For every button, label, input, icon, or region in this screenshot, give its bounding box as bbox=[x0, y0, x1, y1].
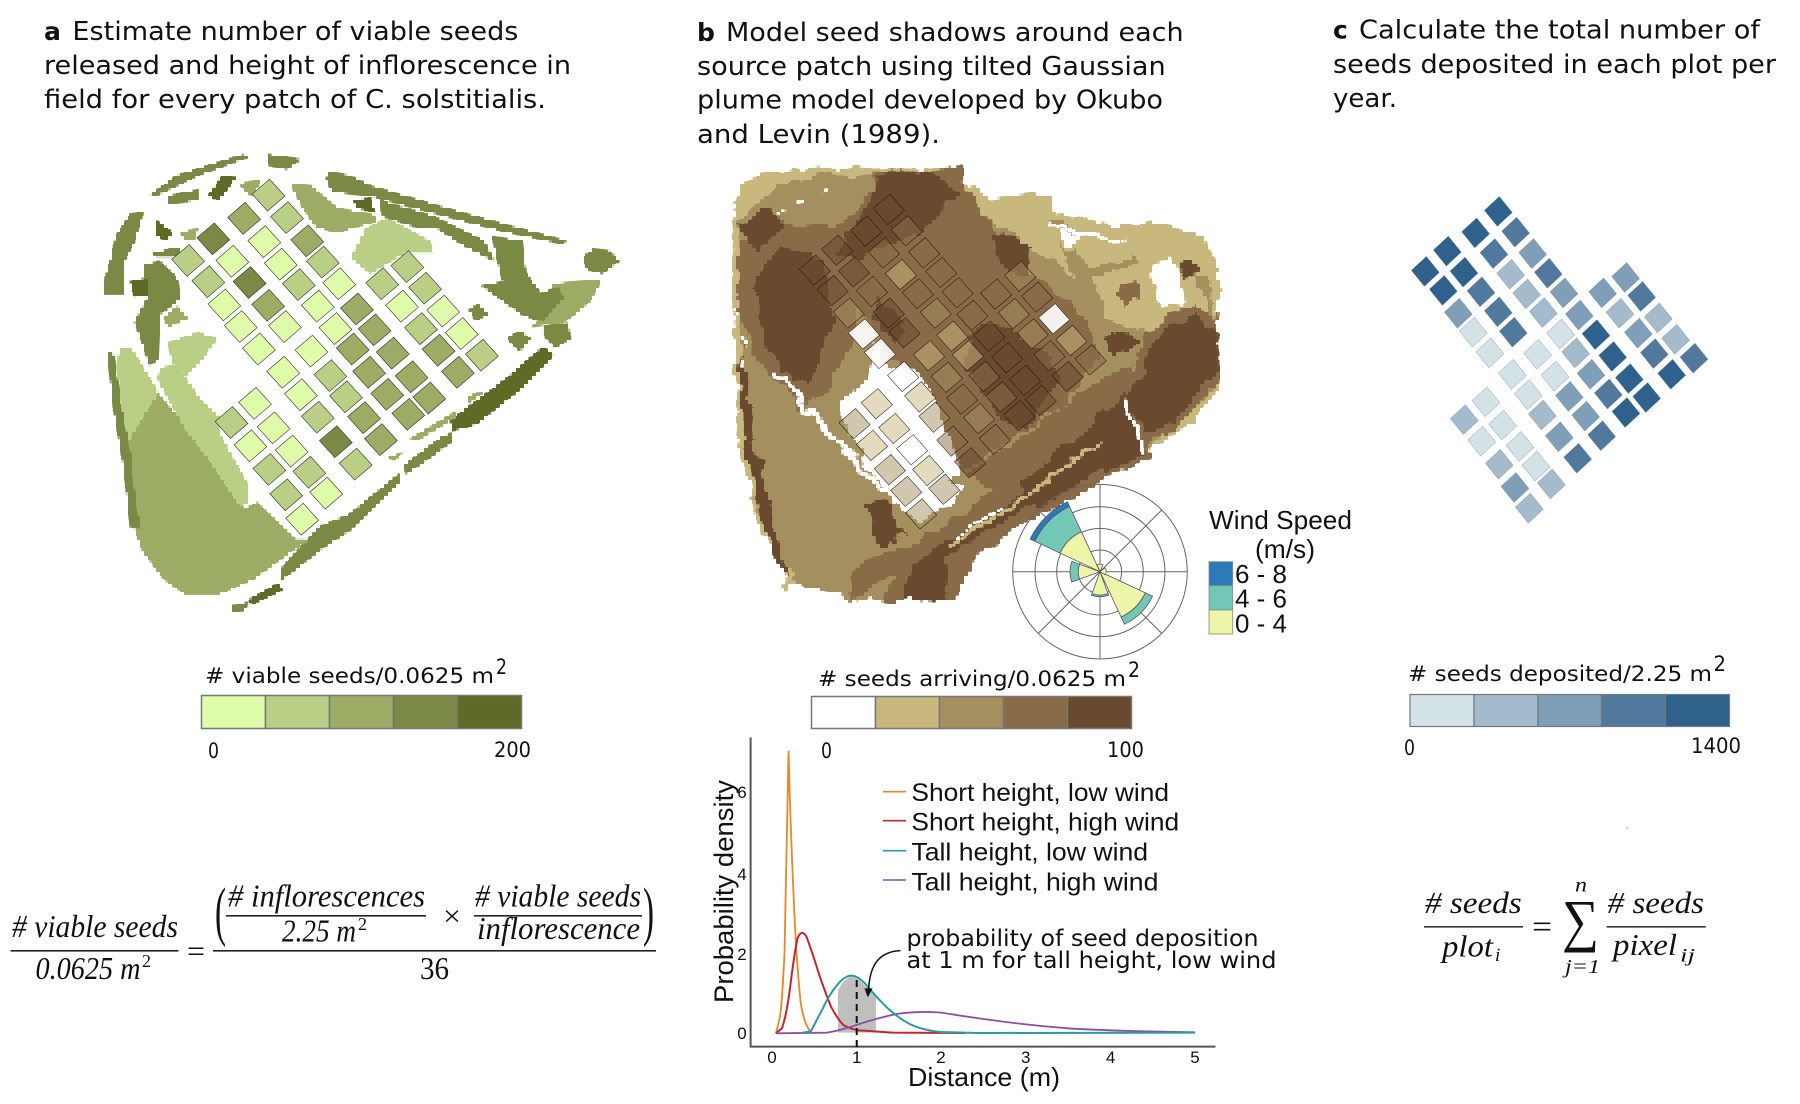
axis tick labels: 3 bbox=[1021, 1048, 1030, 1067]
heading: panel b: and Levin (1989). bbox=[697, 120, 940, 150]
chart legend: Tall height, high wind bbox=[911, 869, 1158, 897]
heading: panel c: Calculate the total number of bbox=[1359, 16, 1761, 46]
legend: seeds deposited colour bar: 2 bbox=[1714, 652, 1726, 676]
legend: seeds deposited colour bar: 0 bbox=[1404, 736, 1415, 760]
legend: wind speed: 6 - 8 bbox=[1235, 559, 1287, 589]
heading: panel a: a bbox=[44, 17, 61, 46]
curves and axes bbox=[751, 737, 1216, 1053]
formula: viable seeds: # viable seeds bbox=[475, 878, 641, 914]
formula: viable seeds: ( bbox=[215, 875, 226, 948]
heading: panel b: plume model developed by Okubo bbox=[697, 85, 1163, 115]
axis tick labels: 4 bbox=[1106, 1048, 1115, 1067]
formula: viable seeds bbox=[10, 875, 656, 986]
formula: viable seeds: inflorescence bbox=[477, 910, 640, 946]
axis tick labels: 2 bbox=[737, 945, 747, 964]
callout: probability of seed deposition: probability of seed deposition bbox=[906, 926, 1258, 952]
legend: seeds arriving colour bar: 100 bbox=[1107, 738, 1144, 762]
heading: panel c: seeds deposited in each plot per bbox=[1333, 50, 1776, 80]
heading: panel b: Model seed shadows around each bbox=[726, 18, 1184, 48]
legend: wind speed: 4 - 6 bbox=[1235, 584, 1287, 614]
formula: seeds per plot: plot bbox=[1440, 929, 1494, 964]
legend: seeds deposited colour bar: # seeds deposited/2.25 m bbox=[1408, 662, 1712, 686]
legend: viable seeds colour bar: # viable seeds/0.0625 m bbox=[205, 664, 494, 688]
chart legend: Short height, low wind bbox=[911, 779, 1169, 807]
formula: viable seeds: 0.0625 m bbox=[36, 950, 140, 986]
legend: viable seeds colour bar: 200 bbox=[494, 738, 531, 762]
axis tick labels bbox=[737, 783, 1200, 1067]
axis tick labels: 0 bbox=[737, 1024, 747, 1043]
heading: panel a: released and height of inflorescence in bbox=[44, 51, 571, 81]
legend: seeds deposited colour bar bbox=[1404, 652, 1741, 760]
formula: viable seeds: 2.25 m bbox=[282, 913, 356, 949]
formula: seeds per plot: n bbox=[1575, 873, 1587, 897]
map: viable seeds per patch bbox=[103, 154, 619, 612]
panel: c seeds deposited bbox=[1333, 16, 1776, 978]
y axis title: Probability density bbox=[709, 780, 739, 1003]
heading: panel c: year. bbox=[1333, 84, 1397, 114]
legend: viable seeds colour bar: 0 bbox=[208, 739, 219, 763]
formula: seeds per plot: # seeds bbox=[1425, 885, 1522, 920]
heading: panel a: field for every patch of C. solstitialis. bbox=[44, 85, 546, 115]
formula: seeds per plot: ∑ bbox=[1562, 888, 1599, 953]
heading: panel c bbox=[1333, 16, 1776, 114]
panel: a viable seeds bbox=[10, 17, 656, 986]
formula: seeds per plot bbox=[1424, 873, 1706, 978]
chart legend: Tall height, low wind bbox=[911, 839, 1148, 867]
chart: wind rose bbox=[1013, 484, 1187, 659]
heading: panel b: source patch using tilted Gaussian bbox=[697, 52, 1166, 82]
map: seeds arriving bbox=[734, 168, 1218, 601]
legend: wind speed: (m/s) bbox=[1255, 534, 1315, 564]
legend: wind speed: 0 - 4 bbox=[1235, 609, 1287, 639]
legend: viable seeds colour bar: 2 bbox=[496, 655, 507, 679]
formula: viable seeds: # inflorescences bbox=[228, 878, 425, 914]
legend: seeds deposited colour bar: 1400 bbox=[1691, 734, 1741, 758]
formula: viable seeds: 36 bbox=[420, 950, 449, 986]
axis tick labels: 2 bbox=[936, 1048, 946, 1067]
axis tick labels: 1 bbox=[852, 1048, 861, 1067]
chart legend: Short height, high wind bbox=[911, 809, 1179, 837]
legend: wind speed bbox=[1209, 505, 1352, 639]
panel: b seed shadows bbox=[697, 18, 1352, 1092]
plot tiles: panel a bbox=[172, 179, 498, 535]
heading: panel a bbox=[44, 17, 571, 115]
axis tick labels: 0 bbox=[767, 1048, 777, 1067]
callout: probability of seed deposition bbox=[906, 926, 1276, 974]
formula: seeds per plot: pixel bbox=[1611, 927, 1677, 962]
axis tick labels: 4 bbox=[737, 865, 747, 884]
formula: seeds per plot: ij bbox=[1680, 946, 1695, 967]
formula: viable seeds: ) bbox=[643, 875, 654, 948]
callout: probability of seed deposition: at 1 m for tall height, low wind bbox=[906, 948, 1276, 974]
legend: seeds arriving colour bar: 0 bbox=[821, 739, 832, 763]
legend: seeds arriving colour bar: # seeds arriving/0.0625 m bbox=[818, 667, 1126, 691]
axis tick labels: 6 bbox=[737, 783, 747, 802]
plot tiles: panel b bbox=[799, 194, 1106, 529]
x axis title: Distance (m) bbox=[908, 1062, 1060, 1092]
chart: probability density of seed deposition bbox=[709, 737, 1276, 1092]
formula: viable seeds: 2 bbox=[358, 914, 367, 934]
formula: seeds per plot: # seeds bbox=[1608, 885, 1704, 920]
formula: viable seeds: # viable seeds bbox=[12, 908, 178, 944]
formula: seeds per plot: i bbox=[1495, 945, 1500, 966]
axis tick labels: 5 bbox=[1190, 1048, 1200, 1067]
map: seeds deposited per plot bbox=[1411, 196, 1708, 523]
heading: panel a: Estimate number of viable seeds bbox=[72, 17, 518, 47]
legend: seeds arriving colour bar bbox=[812, 658, 1144, 763]
legend: seeds arriving colour bar: 2 bbox=[1128, 658, 1140, 682]
formula: seeds per plot: = bbox=[1532, 908, 1552, 944]
heading: panel b bbox=[697, 18, 1184, 150]
heading: panel c: c bbox=[1333, 16, 1348, 45]
formula: viable seeds: × bbox=[443, 900, 461, 933]
legend: viable seeds colour bar bbox=[202, 655, 531, 763]
chart legend bbox=[883, 779, 1179, 897]
formula: viable seeds: 2 bbox=[142, 951, 151, 971]
formula: viable seeds: = bbox=[187, 935, 205, 968]
heading: panel b: b bbox=[697, 18, 715, 47]
legend: wind speed: Wind Speed bbox=[1209, 505, 1352, 535]
formula: seeds per plot: j=1 bbox=[1561, 956, 1600, 978]
